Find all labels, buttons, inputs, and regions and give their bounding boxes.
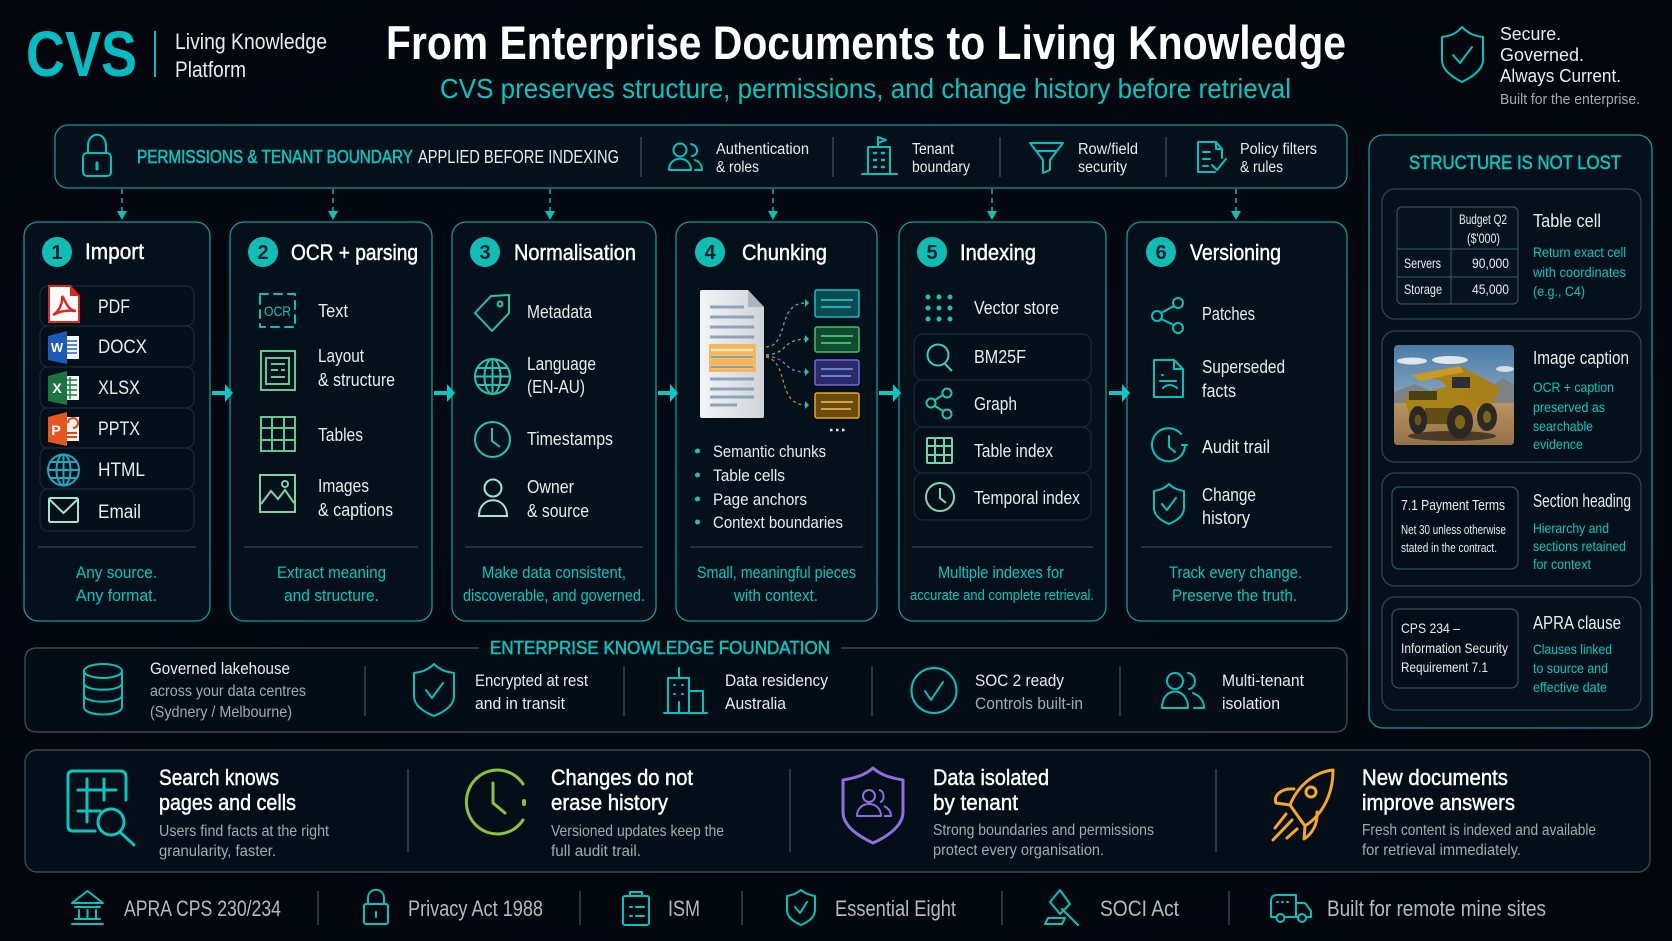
icon: layout <box>261 351 295 390</box>
panel: 2 OCR + parsing: OCR + parsing <box>291 240 418 265</box>
card: image caption: preserved as <box>1533 399 1605 415</box>
panel: benefits <box>25 750 1650 872</box>
panel: enterprise knowledge foundation: Australia <box>725 694 787 713</box>
benefit: search knows pages and cells <box>68 765 329 860</box>
icon: clipboard <box>623 892 649 925</box>
benefit: changes do not erase history: Changes do not <box>551 765 693 790</box>
benefit: search knows pages and cells: Users find facts at the right <box>159 823 329 840</box>
benefit: search knows pages and cells: pages and cells <box>159 790 296 815</box>
panel: 3 Normalisation <box>452 222 656 621</box>
image: mining dump truck <box>1394 345 1514 445</box>
caption: Multiple indexes for <box>938 564 1064 582</box>
card: section heading: Net 30 unless otherwise <box>1401 522 1506 537</box>
icon: superseded facts <box>1154 360 1183 397</box>
panel: 6 Versioning: 6 <box>1155 242 1167 264</box>
panel: permissions and tenant boundary band <box>55 125 1347 188</box>
bullet list: Semantic chunks <box>713 442 826 461</box>
icon: funnel <box>1030 143 1063 173</box>
card: table cell: 45,000 <box>1472 281 1509 297</box>
card: APRA clause: effective date <box>1533 679 1607 695</box>
benefit: new documents improve answers: Fresh content is indexed and available <box>1362 822 1596 839</box>
benefit: data isolated by tenant: Strong boundaries and permissions <box>933 822 1154 839</box>
panel: 2 OCR + parsing <box>230 222 432 621</box>
icon: temporal index <box>926 483 954 511</box>
panel: permissions and tenant boundary band: & rules <box>1240 159 1283 176</box>
card: table cell: ($'000) <box>1467 230 1500 246</box>
benefit: changes do not erase history: erase history <box>551 790 668 815</box>
icon: metadata tag <box>475 295 509 331</box>
panel: 2 OCR + parsing: & captions <box>318 500 393 520</box>
benefit: changes do not erase history: Versioned updates keep the <box>551 823 724 840</box>
icon: graph <box>926 388 952 418</box>
panel: 6 Versioning: Patches <box>1202 304 1255 324</box>
panel: 6 Versioning: Versioning <box>1190 240 1281 265</box>
file format list: HTML <box>98 460 145 481</box>
panel: permissions and tenant boundary band: & roles <box>716 159 759 176</box>
card: APRA clause <box>1382 597 1641 710</box>
card: table cell: Storage <box>1404 281 1442 297</box>
panel: permissions and tenant boundary band: Authentication <box>716 141 809 158</box>
card: APRA clause: APRA clause <box>1533 613 1621 633</box>
card: image caption: searchable <box>1533 418 1593 434</box>
panel: enterprise knowledge foundation: ENTERPRISE KNOWLEDGE FOUNDATION <box>490 637 830 658</box>
panel: enterprise knowledge foundation: (Sydnery / Melbourne) <box>150 704 292 721</box>
panel: enterprise knowledge foundation: across your data centres <box>150 683 306 700</box>
panel: 6 Versioning: Change <box>1202 485 1256 505</box>
panel: 3 Normalisation: (EN-AU) <box>527 377 585 397</box>
card: table cell: Budget Q2 <box>1459 211 1507 227</box>
icon: XLSX <box>48 371 79 405</box>
icon: XLSX: X <box>52 380 62 396</box>
card: image caption <box>1382 331 1641 462</box>
title: From Enterprise Documents to Living Knowledge <box>386 16 1346 69</box>
card: APRA clause: to source and <box>1533 660 1608 676</box>
panel: enterprise knowledge foundation: and in transit <box>475 694 565 713</box>
benefit: data isolated by tenant: protect every organisation. <box>933 842 1104 859</box>
panel: 2 OCR + parsing: Layout <box>318 346 364 366</box>
panel: 3 Normalisation: Owner <box>527 477 574 497</box>
tagline: secure governed always current: Governed. <box>1500 45 1584 65</box>
icon: vector dots <box>926 294 952 322</box>
caption: Track every change. <box>1169 564 1302 582</box>
icon: patches <box>1152 298 1183 333</box>
bullet list <box>695 442 843 532</box>
icon: timestamp clock <box>475 422 510 457</box>
card: section heading: 7.1 Payment Terms <box>1401 497 1505 514</box>
arrows: permissions applied to each stage <box>117 189 1241 220</box>
tagline: secure governed always current: Built for the enterprise. <box>1500 91 1640 108</box>
icon: bank <box>72 891 103 924</box>
panel: permissions and tenant boundary band: security <box>1078 159 1127 176</box>
bullet list: Context boundaries <box>713 513 843 532</box>
panel: 4 Chunking <box>676 222 877 621</box>
panel: 3 Normalisation: Timestamps <box>527 429 613 449</box>
icon: HTML globe <box>48 454 79 486</box>
benefit: new documents improve answers: for retrieval immediately. <box>1362 842 1521 859</box>
card: section heading: for context <box>1533 556 1591 572</box>
icon: users <box>669 144 702 170</box>
benefit: new documents improve answers <box>1273 765 1596 859</box>
card: section heading: Hierarchy and <box>1533 520 1609 536</box>
icon: PPTX <box>48 412 79 446</box>
illustration: document split into chunks <box>700 290 859 430</box>
file format list: PDF <box>98 297 130 318</box>
file format list: DOCX <box>98 337 147 358</box>
icon: DOCX: W <box>51 340 64 355</box>
icon: multi-tenant users <box>1162 673 1204 708</box>
caption: with context. <box>733 587 818 605</box>
panel: 1 Import <box>24 222 210 621</box>
panel: 3 Normalisation: Language <box>527 354 596 374</box>
panel: permissions and tenant boundary band: Policy filters <box>1240 141 1317 158</box>
panel: 6 Versioning: history <box>1202 508 1250 528</box>
icon: tables <box>261 417 295 451</box>
card: table cell: (e.g., C4) <box>1533 283 1585 299</box>
panel: enterprise knowledge foundation: Data residency <box>725 671 828 690</box>
icon: database <box>84 664 122 714</box>
caption: accurate and complete retrieval. <box>910 587 1094 604</box>
benefit: data isolated by tenant: by tenant <box>933 790 1018 815</box>
panel: 6 Versioning: facts <box>1202 381 1236 401</box>
caption <box>697 564 856 605</box>
panel: 5 Indexing: 5 <box>926 242 938 264</box>
panel: enterprise knowledge foundation: Governed lakehouse <box>150 660 290 678</box>
benefit: search knows pages and cells: granularity, faster. <box>159 843 276 860</box>
panel: 4 Chunking: Chunking <box>742 240 827 265</box>
file format list: Email <box>98 502 141 523</box>
panel: structure is not lost <box>1369 135 1652 728</box>
panel: 3 Normalisation: 3 <box>479 242 491 264</box>
panel: 6 Versioning: Audit trail <box>1202 437 1270 457</box>
benefit: data isolated by tenant: Data isolated <box>933 765 1049 790</box>
logo: CVS Living Knowledge Platform <box>26 18 327 90</box>
caption: Extract meaning <box>277 564 386 582</box>
caption: and structure. <box>284 587 379 605</box>
panel: 5 Indexing: BM25F <box>974 347 1026 367</box>
icon: email <box>49 498 78 522</box>
panel: 2 OCR + parsing: Tables <box>318 425 363 445</box>
icon: encrypted shield <box>414 664 454 716</box>
card: section heading: Section heading <box>1533 491 1631 511</box>
panel: 2 OCR + parsing: Text <box>318 301 348 321</box>
bullet list: Table cells <box>713 466 785 485</box>
icon: owner <box>479 480 507 516</box>
footer: compliance strip: SOCI Act <box>1100 896 1179 921</box>
icon: lock <box>83 135 111 176</box>
panel: 1 Import: Import <box>85 239 144 264</box>
icon: policy document <box>1198 142 1226 172</box>
card: table cell: with coordinates <box>1532 264 1626 280</box>
panel: 5 Indexing: Vector store <box>974 298 1059 318</box>
card: APRA clause: CPS 234 – <box>1401 620 1460 636</box>
footer: compliance strip: Essential Eight <box>835 896 956 921</box>
panel: 5 Indexing: Graph <box>974 394 1017 414</box>
icon: OCR text <box>260 294 295 327</box>
arrows: flow between stages <box>212 384 1130 402</box>
benefit: search knows pages and cells: Search knows <box>159 765 279 790</box>
footer: compliance strip <box>72 890 1546 925</box>
icon: PDF <box>49 286 79 322</box>
logo: CVS Living Knowledge Platform: Living Knowledge <box>175 29 327 54</box>
card: section heading <box>1382 473 1641 586</box>
icon: change history <box>1154 484 1184 524</box>
caption: Preserve the truth. <box>1172 587 1297 605</box>
panel: 5 Indexing: Table index <box>974 441 1053 461</box>
panel: 2 OCR + parsing: 2 <box>257 242 269 264</box>
card: table cell: Table cell <box>1533 211 1601 231</box>
panel: 2 OCR + parsing: & structure <box>318 370 395 390</box>
footer: compliance strip: ISM <box>668 896 700 921</box>
icon: data residency building <box>664 668 707 713</box>
logo: CVS Living Knowledge Platform: Platform <box>175 57 246 82</box>
panel: 5 Indexing: Indexing <box>960 240 1036 265</box>
panel: permissions and tenant boundary band: boundary <box>912 159 970 176</box>
icon: audit trail <box>1152 428 1187 461</box>
panel: 6 Versioning <box>1127 222 1347 621</box>
icon: table index <box>927 438 952 463</box>
file format list: PPTX <box>98 419 140 440</box>
panel: 3 Normalisation: Normalisation <box>514 240 636 265</box>
panel: enterprise knowledge foundation: Encrypted at rest <box>475 671 588 690</box>
icon: tenant building <box>862 137 897 174</box>
tagline: secure governed always current <box>1442 24 1640 108</box>
caption: Any format. <box>76 587 157 605</box>
panel: 5 Indexing: Temporal index <box>974 488 1080 508</box>
icon: BM25F search <box>928 344 952 371</box>
icon: lock <box>364 890 388 924</box>
panel: 5 Indexing <box>899 222 1106 621</box>
benefit: changes do not erase history <box>466 765 724 860</box>
benefit: data isolated by tenant <box>843 765 1154 859</box>
icon: OCR text: OCR <box>264 303 291 319</box>
footer: compliance strip: Built for remote mine sites <box>1327 896 1546 921</box>
benefit: changes do not erase history: full audit trail. <box>551 843 641 860</box>
benefit: new documents improve answers: improve answers <box>1362 790 1515 815</box>
caption: Any source. <box>76 564 157 582</box>
card: APRA clause: Requirement 7.1 <box>1401 659 1488 675</box>
card: table cell: Servers <box>1404 255 1441 271</box>
panel: structure is not lost: STRUCTURE IS NOT LOST <box>1409 153 1621 174</box>
card: image caption: Image caption <box>1533 348 1629 368</box>
icon: image <box>260 475 295 512</box>
tagline: secure governed always current: Secure. <box>1500 24 1561 44</box>
panel: permissions and tenant boundary band: PERMISSIONS & TENANT BOUNDARY <box>137 147 413 167</box>
card: APRA clause: Clauses linked <box>1533 641 1612 657</box>
caption <box>910 564 1094 604</box>
panel: permissions and tenant boundary band: APPLIED BEFORE INDEXING <box>418 147 619 167</box>
icon: DOCX <box>48 331 79 364</box>
card: table cell: Return exact cell <box>1533 244 1626 260</box>
icon: language globe <box>475 359 510 394</box>
subtitle: CVS preserves structure, permissions, and change history before retrieval <box>440 73 1291 104</box>
panel: 3 Normalisation: Metadata <box>527 302 593 322</box>
icon: gavel <box>1045 890 1078 925</box>
card: table cell <box>1382 189 1641 319</box>
panel: 3 Normalisation: & source <box>527 501 589 521</box>
card: image caption: OCR + caption <box>1533 379 1614 395</box>
panel: 1 Import: 1 <box>51 242 63 264</box>
panel: 2 OCR + parsing: Images <box>318 476 369 496</box>
file format list <box>40 286 194 531</box>
panel: enterprise knowledge foundation: isolation <box>1222 694 1280 713</box>
caption <box>1169 564 1302 605</box>
panel: enterprise knowledge foundation: Multi-tenant <box>1222 671 1304 690</box>
panel: enterprise knowledge foundation: Controls built-in <box>975 694 1083 713</box>
caption: discoverable, and governed. <box>463 587 645 605</box>
panel: 4 Chunking: 4 <box>704 242 716 264</box>
panel: 6 Versioning: Superseded <box>1202 357 1285 377</box>
icon: truck <box>1271 895 1311 922</box>
panel: permissions and tenant boundary band: Tenant <box>912 141 955 158</box>
caption <box>76 564 157 605</box>
footer: compliance strip: Privacy Act 1988 <box>408 896 543 921</box>
tagline: secure governed always current: Always Current. <box>1500 66 1621 86</box>
icon: SOC 2 check <box>912 668 956 713</box>
caption: Small, meaningful pieces <box>697 564 856 582</box>
card: section heading: stated in the contract. <box>1401 540 1497 555</box>
card: section heading: sections retained <box>1533 538 1626 554</box>
caption: Make data consistent, <box>482 564 626 582</box>
panel: enterprise knowledge foundation <box>25 637 1347 732</box>
benefit: new documents improve answers: New documents <box>1362 765 1508 790</box>
panel: enterprise knowledge foundation: SOC 2 ready <box>975 671 1064 690</box>
caption <box>277 564 386 605</box>
caption <box>463 564 645 605</box>
card: APRA clause: Information Security <box>1401 640 1508 656</box>
card: image caption: evidence <box>1533 436 1583 452</box>
card: table cell: 90,000 <box>1472 255 1509 271</box>
file format list: XLSX <box>98 378 140 399</box>
icon: PPTX: P <box>51 422 61 438</box>
icon: shield <box>787 890 815 925</box>
panel: permissions and tenant boundary band: Row/field <box>1078 141 1138 158</box>
bullet list: Page anchors <box>713 490 807 509</box>
logo: CVS Living Knowledge Platform: CVS <box>26 18 137 90</box>
footer: compliance strip: APRA CPS 230/234 <box>124 896 281 921</box>
